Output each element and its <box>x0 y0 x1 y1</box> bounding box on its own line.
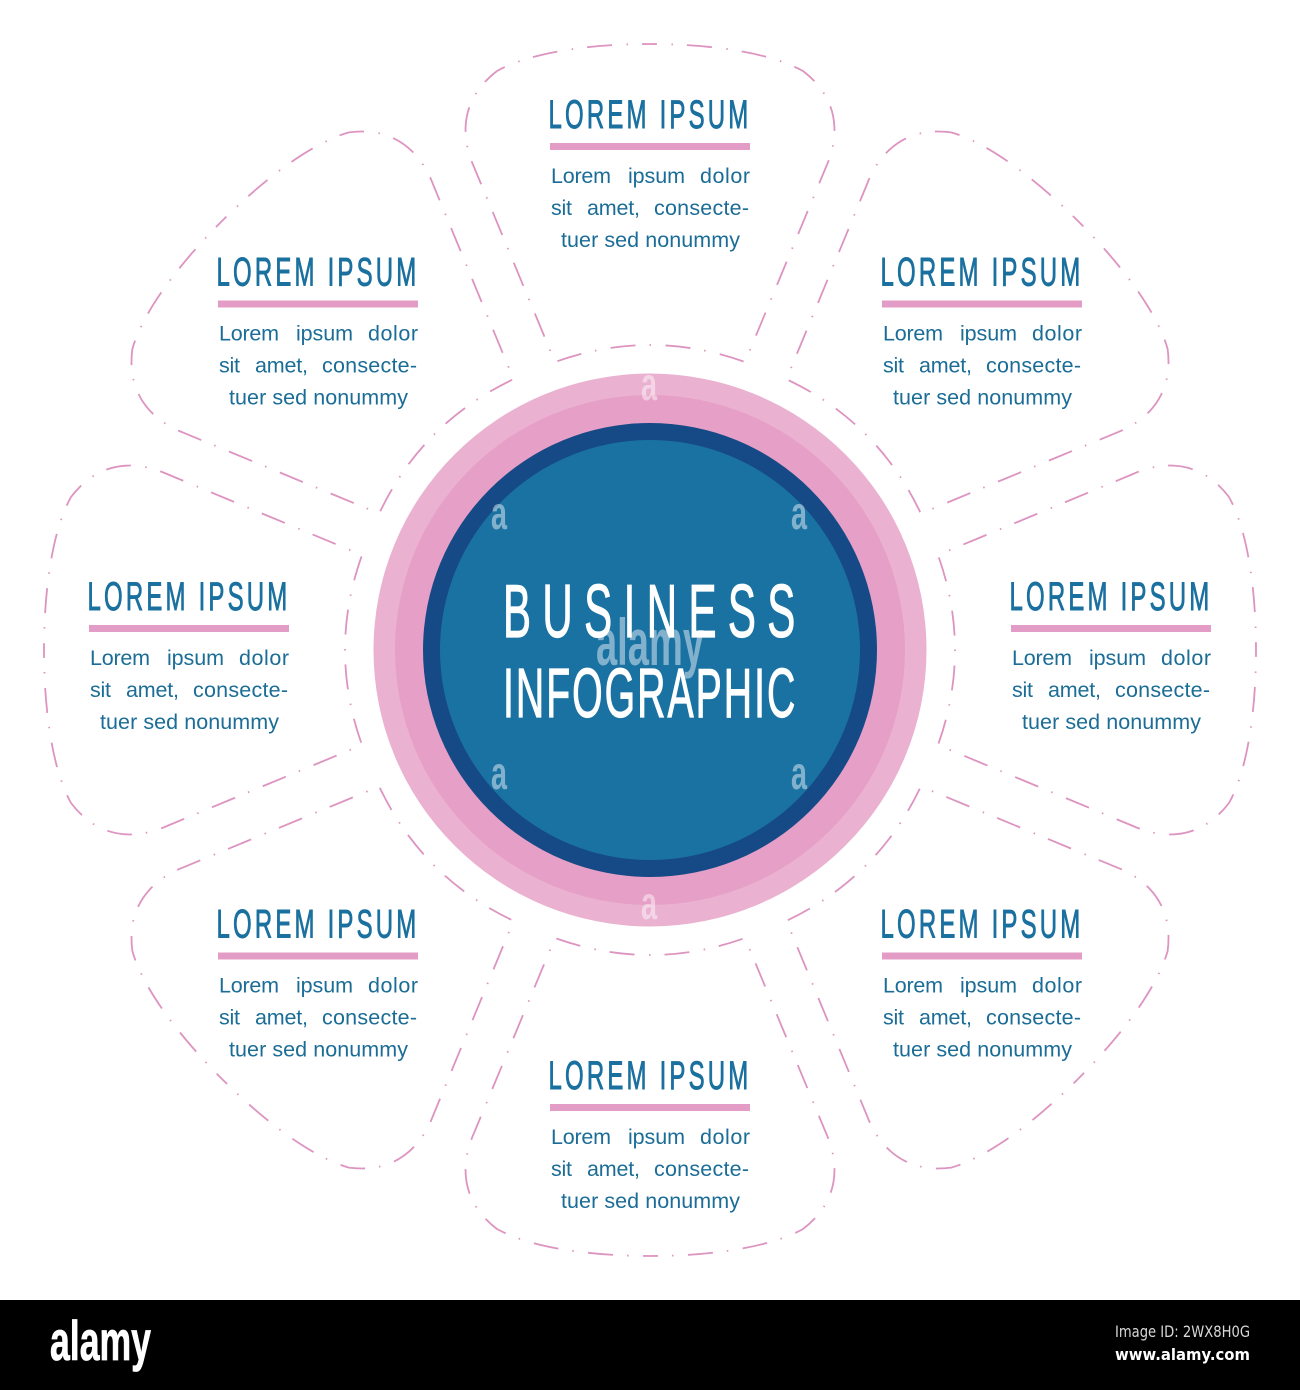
text block: lower right: Lorem <box>883 974 943 998</box>
text block: top: Lorem <box>551 164 611 188</box>
text block: lower left: ipsum <box>296 974 353 998</box>
text block: top: tuer sed nonummy <box>561 228 740 252</box>
text block: bottom: consecte- <box>654 1157 749 1181</box>
watermark marks: a <box>791 747 807 799</box>
text block: left: consecte- <box>193 678 288 702</box>
text block: upper left: ipsum <box>296 322 353 346</box>
watermark marks: a <box>641 358 657 410</box>
text block: upper left: consecte- <box>322 354 417 378</box>
text block: top: dolor <box>700 164 750 188</box>
text block: right: amet, <box>1048 678 1101 702</box>
petal outline: bottom <box>466 938 834 1256</box>
text block: lower left: sit <box>219 1006 240 1030</box>
text block: upper right: Lorem <box>883 322 943 346</box>
text block: lower right: amet, <box>919 1006 972 1030</box>
text block: lower left: consecte- <box>322 1006 417 1030</box>
text block: right: dolor <box>1161 646 1211 670</box>
image id: Image ID: 2WX8H0G <box>1115 1322 1250 1341</box>
website: www.alamy.com <box>1115 1345 1250 1364</box>
petal outline: right <box>938 466 1256 834</box>
text block: bottom: LOREM IPSUM <box>548 1053 748 1097</box>
text block: bottom: dolor <box>700 1125 750 1149</box>
watermark marks: a <box>791 487 807 539</box>
text block: upper left: tuer sed nonummy <box>229 386 408 410</box>
text block: bottom: ipsum <box>628 1125 685 1149</box>
text block: bottom: sit <box>551 1157 572 1181</box>
text block: top: LOREM IPSUM <box>548 92 748 136</box>
text block: lower right: tuer sed nonummy <box>893 1038 1072 1062</box>
central circle <box>374 374 926 926</box>
text block: left: Lorem <box>90 646 150 670</box>
text block: left: LOREM IPSUM <box>88 574 287 618</box>
text block: left: ipsum <box>167 646 224 670</box>
text block: top: amet, <box>587 196 640 220</box>
watermark marks: a <box>491 487 507 539</box>
text block: top: consecte- <box>654 196 749 220</box>
center title: INFOGRAPHIC <box>503 655 795 733</box>
text block: lower right <box>880 901 1082 1062</box>
text block: lower left: Lorem <box>219 974 279 998</box>
text block: right <box>1010 574 1211 734</box>
text block: upper right: ipsum <box>960 322 1017 346</box>
text block: left: sit <box>90 678 111 702</box>
text block: lower right: ipsum <box>960 974 1017 998</box>
text block: upper right <box>880 249 1082 410</box>
footer logo: alamy <box>50 1309 151 1372</box>
text block: upper right: LOREM IPSUM <box>880 249 1080 294</box>
text block: right: sit <box>1012 678 1033 702</box>
text block: lower right: consecte- <box>986 1006 1081 1030</box>
watermark marks: a <box>641 877 657 929</box>
text block: top: ipsum <box>628 164 685 188</box>
text block: right: LOREM IPSUM <box>1010 574 1209 618</box>
text block: left: tuer sed nonummy <box>100 710 279 734</box>
watermark marks: a <box>491 747 507 799</box>
text block: right: tuer sed nonummy <box>1022 710 1201 734</box>
text block: upper right: consecte- <box>986 354 1081 378</box>
petal outline: left <box>44 466 362 834</box>
text block: bottom: amet, <box>587 1157 640 1181</box>
footer bar <box>0 1300 1300 1390</box>
text block: upper left <box>216 249 418 410</box>
text block: upper right: amet, <box>919 354 972 378</box>
text block: lower left <box>216 901 418 1062</box>
petal outline: lower right <box>723 723 1209 1209</box>
text block: upper left: Lorem <box>219 322 279 346</box>
text block: right: Lorem <box>1012 646 1072 670</box>
text block: upper left: amet, <box>255 354 308 378</box>
text block: top: sit <box>551 196 572 220</box>
text block: left <box>88 574 289 734</box>
text block: top <box>548 92 750 252</box>
text block: upper left: sit <box>219 354 240 378</box>
watermark marks <box>491 358 807 929</box>
text block: bottom: tuer sed nonummy <box>561 1189 740 1213</box>
text block: bottom <box>548 1053 750 1213</box>
watermark: center logo: alamy <box>596 605 704 679</box>
text block: lower left: amet, <box>255 1006 308 1030</box>
center title <box>503 569 795 733</box>
text block: right: consecte- <box>1115 678 1210 702</box>
text block: upper left: dolor <box>368 322 418 346</box>
text block: lower right: dolor <box>1032 974 1082 998</box>
text block: lower right: LOREM IPSUM <box>880 901 1080 946</box>
text block: upper right: dolor <box>1032 322 1082 346</box>
petal outline: upper left <box>91 91 577 577</box>
text block: left: dolor <box>239 646 289 670</box>
text block: upper left: LOREM IPSUM <box>216 249 416 294</box>
text block: upper right: tuer sed nonummy <box>893 386 1072 410</box>
text block: bottom: Lorem <box>551 1125 611 1149</box>
petal outline: top <box>466 44 834 362</box>
center title: BUSINESS <box>503 569 795 653</box>
text block: right: ipsum <box>1089 646 1146 670</box>
text block: lower left: LOREM IPSUM <box>216 901 416 946</box>
text block: lower right: sit <box>883 1006 904 1030</box>
text block: lower left: tuer sed nonummy <box>229 1038 408 1062</box>
petal outline: upper right <box>723 91 1209 577</box>
text block: upper right: sit <box>883 354 904 378</box>
text block: lower left: dolor <box>368 974 418 998</box>
petal outline: lower left <box>91 723 577 1209</box>
text block: left: amet, <box>126 678 179 702</box>
